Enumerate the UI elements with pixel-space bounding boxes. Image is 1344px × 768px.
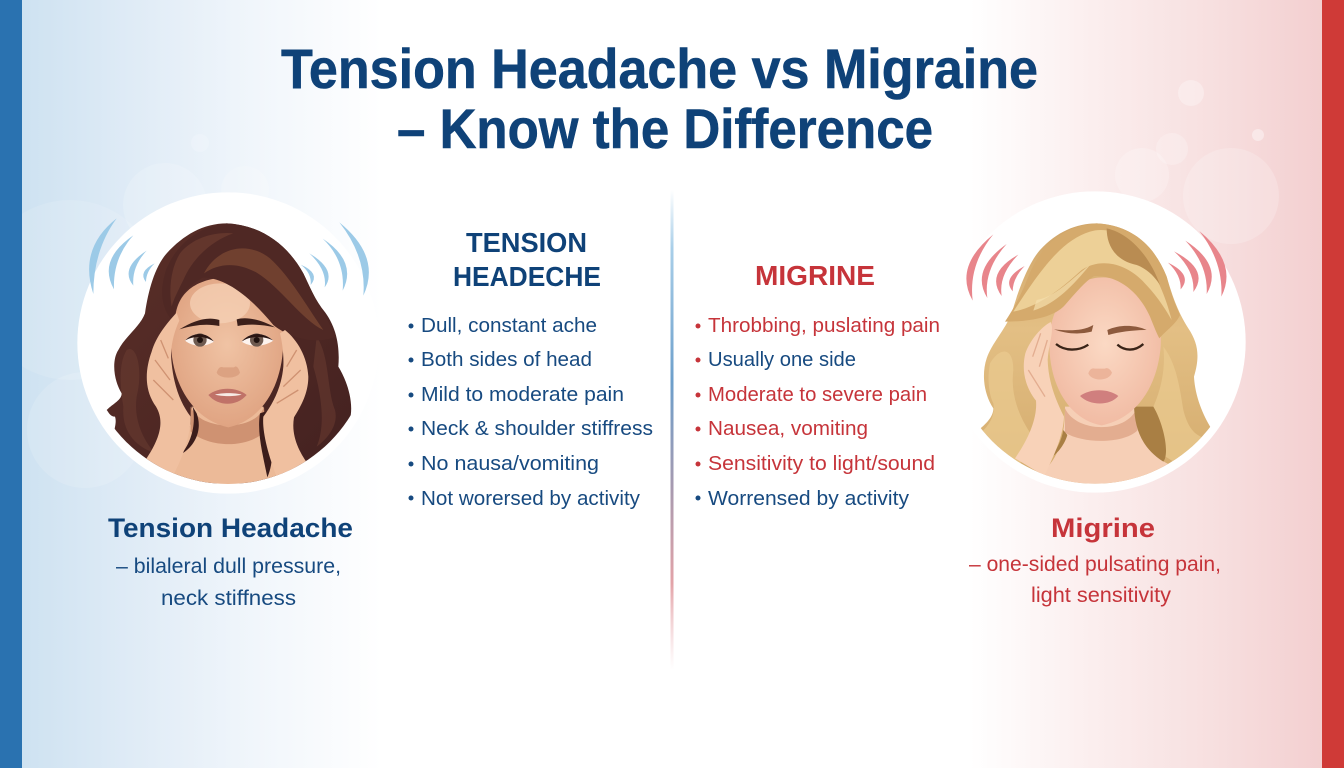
left accent bar [0,0,22,768]
tension caption: – bilaleral dull pressure, [116,555,341,578]
tension column heading [453,227,601,292]
right accent bar [1322,0,1344,768]
closed eyes [1056,344,1088,350]
forehead light [190,283,250,323]
migraine column heading: MIGRINE [755,260,875,291]
tension column heading: TENSION [466,227,587,258]
illustration: tension headache woman [77,192,379,494]
neck and chest [160,406,296,484]
tension caption: Tension Headache [108,513,353,543]
neck and chest [1045,406,1168,484]
tension symptom list: Both sides of head [421,348,592,371]
portrait circle [77,192,379,494]
tension symptom list: No nausa/vomiting [421,452,599,475]
tension column heading: HEADECHE [453,261,601,292]
center divider [670,190,674,670]
migraine symptom list: Usually one side [708,348,856,371]
pain waves right [1168,231,1226,297]
eyes [185,334,214,346]
hair back [977,223,1213,487]
face [171,277,283,427]
title: – Know the Difference [397,97,933,160]
neck shadow hair [1051,407,1166,462]
eyebrows [179,319,219,329]
nose [217,366,240,378]
tension symptom list: Neck & shoulder stiffress [421,417,653,440]
migraine symptom list: Sensitivity to light/sound [708,452,935,475]
pain waves left [89,218,155,294]
mouth [1080,390,1118,403]
eyebrows [1054,325,1093,333]
tension caption: neck stiffness [161,587,296,610]
migraine symptom list: Moderate to severe pain [708,383,927,406]
hair back [107,223,351,483]
title: Tension Headache vs Migraine [281,37,1038,100]
portrait circle [944,191,1246,493]
hair front [1005,223,1180,338]
hair front sweep [213,223,318,340]
migraine caption [969,513,1221,607]
tension symptom list: Dull, constant ache [421,314,597,337]
hair strands [182,407,272,477]
illustration: migraine woman [944,191,1246,493]
face [1049,277,1161,425]
migraine symptom list: Throbbing, puslating pain [708,314,940,337]
pain waves right [301,222,369,296]
tension symptom list: Not worersed by activity [421,487,641,510]
tension symptom list [408,314,653,510]
tension symptom list: Mild to moderate pain [421,383,624,406]
right hand [263,330,309,478]
hair shading [980,347,1207,467]
left hand [145,313,191,475]
migraine symptom list [696,314,940,510]
nose [1088,368,1112,380]
pain waves left [966,234,1025,301]
title [281,37,1038,160]
migraine caption: Migrine [1051,513,1155,543]
migraine caption: – one-sided pulsating pain, [969,553,1221,576]
mouth [208,389,247,404]
migraine symptom list: Nausea, vomiting [708,417,868,440]
migraine caption: light sensitivity [1031,584,1172,607]
migraine symptom list: Worrensed by activity [708,487,910,510]
hair highlights [121,337,336,453]
hand [1015,322,1064,476]
tension caption [108,513,353,610]
